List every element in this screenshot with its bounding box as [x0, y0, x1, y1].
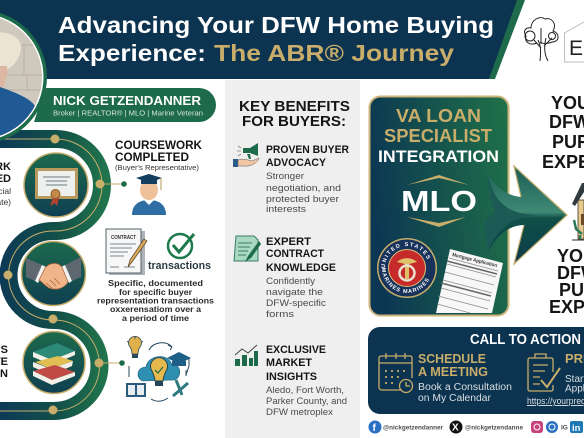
card heading: INTEGRATION: [378, 147, 499, 166]
icon: green check: [168, 234, 194, 258]
panel: call to action: [368, 327, 584, 414]
benefit: exclusive market insights: Parker County, and: [266, 396, 347, 407]
benefit: expert contract knowledge: KNOWLEDGE: [266, 262, 336, 274]
transactions description: for specific buyer: [119, 288, 192, 297]
CTA: schedule a meeting: [418, 351, 512, 404]
panel: key benefits: [233, 98, 350, 418]
icon: contract document: [234, 236, 261, 262]
benefit: proven buyer advocacy: ADVOCACY: [266, 157, 327, 169]
icon: rising bar chart: [235, 345, 258, 366]
icon: facebook: [368, 420, 382, 434]
transactions description: representation transactions: [97, 296, 215, 306]
icon: linkedin: in: [572, 423, 581, 434]
facebook handle: @nickgetzendanner: [383, 424, 443, 432]
circle: certificate: [24, 153, 88, 217]
benefit: exclusive market insights: INSIGHTS: [266, 371, 317, 383]
upper outcome text: [542, 93, 584, 172]
benefit: exclusive market insights: DFW metroplex: [266, 407, 333, 418]
transactions description: Specific, documented: [108, 279, 203, 288]
icon: threads: [546, 421, 558, 433]
benefit: exclusive market insights: EXCLUSIVE: [266, 344, 326, 356]
US Marines seal: UNITED STATES: [381, 242, 430, 268]
benefit: expert contract knowledge: EXPERT: [266, 236, 311, 248]
benefit: expert contract knowledge: forms: [266, 309, 294, 320]
circle: handshake: [22, 242, 86, 306]
social media row: [368, 420, 583, 434]
coursework completed text: [115, 140, 203, 172]
card heading: VA LOAN: [396, 106, 481, 126]
circle: books: [23, 332, 85, 394]
title: [58, 12, 494, 66]
header banner: [0, 0, 525, 79]
CTA: schedule a meeting: A MEETING: [418, 364, 488, 379]
benefit: exclusive market insights: Aledo, Fort Worth,: [266, 385, 344, 396]
CTA: pre-approval: [527, 351, 584, 407]
MLO badge: [401, 175, 477, 227]
left clipped step labels: education: [0, 344, 8, 380]
transactions description: [97, 279, 215, 323]
CTA: schedule a meeting: SCHEDULE: [418, 351, 486, 366]
icon: contract: [106, 229, 147, 275]
coursework completed text: COURSEWORK: [115, 140, 203, 152]
lower outcome text: [549, 246, 584, 317]
panel: VA loan card: [368, 96, 510, 316]
icon: house with people: [572, 183, 584, 240]
coursework completed text: (Buyer's Representative): [115, 163, 199, 172]
card heading: [378, 106, 499, 166]
benefit: proven buyer advocacy: negotiation, and: [266, 183, 341, 194]
benefit: expert contract knowledge: navigate the: [266, 287, 323, 298]
icon: contract: CONTRACT: [111, 235, 136, 241]
S-shaped ribbon: [0, 134, 127, 414]
CTA: schedule a meeting: on My Calendar: [418, 393, 492, 404]
name banner: Broker | REALTOR® | MLO | Marine Veteran: [53, 110, 203, 118]
icon: graduate: [132, 174, 166, 215]
profile photo: [0, 10, 47, 145]
transactions label: transactions: [148, 260, 211, 272]
X handle: @nickgetzendanne: [465, 424, 523, 432]
benefit: proven buyer advocacy: Stronger: [266, 171, 304, 182]
card heading: SPECIALIST: [384, 126, 492, 146]
benefit: exclusive market insights: [266, 344, 347, 418]
icon: clipboard: [528, 354, 560, 391]
coursework completed text: COMPLETED: [115, 152, 189, 164]
logo: E: [569, 37, 583, 60]
MLO badge: MLO: [401, 186, 477, 218]
left clipped step labels: coursework: [0, 161, 11, 207]
benefits panel background: [225, 80, 360, 438]
transactions description: a period of time: [122, 314, 190, 323]
benefit: expert contract knowledge: CONTRACT: [266, 248, 324, 260]
name banner: [34, 88, 216, 122]
benefits heading: KEY BENEFITS: [239, 98, 350, 115]
title: Experience:: [58, 40, 206, 66]
logo: [525, 18, 584, 62]
icon: X: [450, 420, 462, 434]
US Marines seal: MARINES MARINES: [382, 268, 429, 294]
transactions description: oxxerensatiom over a: [110, 305, 202, 314]
benefit: proven buyer advocacy: interests: [266, 204, 306, 215]
IG label: IG: [561, 424, 568, 432]
benefit: proven buyer advocacy: protected buyer: [266, 194, 339, 205]
arrow: [484, 166, 567, 264]
benefit: exclusive market insights: MARKET: [266, 357, 312, 369]
benefits heading: FOR BUYERS:: [242, 113, 346, 130]
mortgage application form: Mortgage Application: [452, 252, 498, 269]
title: Advancing Your DFW Home Buying: [58, 12, 494, 38]
benefit: expert contract knowledge: [266, 236, 336, 320]
benefit: expert contract knowledge: DFW-specific: [266, 298, 326, 309]
benefits heading: [239, 98, 350, 130]
icon: X: X: [452, 422, 459, 434]
icon: instagram: [531, 421, 543, 433]
benefit: proven buyer advocacy: PROVEN BUYER: [266, 144, 349, 156]
icon: linkedin: [570, 421, 583, 434]
icon cluster: learning concepts: [126, 336, 191, 401]
title: The ABR® Journey: [214, 40, 454, 66]
benefit: proven buyer advocacy: [266, 144, 349, 215]
name banner: NICK GETZENDANNER: [53, 94, 201, 108]
US Marines seal: [377, 238, 437, 298]
icon: megaphone and hand: [233, 143, 259, 167]
benefit: expert contract knowledge: Confidently: [266, 276, 315, 287]
icon: facebook: f: [372, 423, 376, 434]
CTA: schedule a meeting: Book a Consultation: [418, 382, 512, 393]
mortgage application form: [436, 249, 503, 313]
icon: calendar: [379, 353, 412, 392]
